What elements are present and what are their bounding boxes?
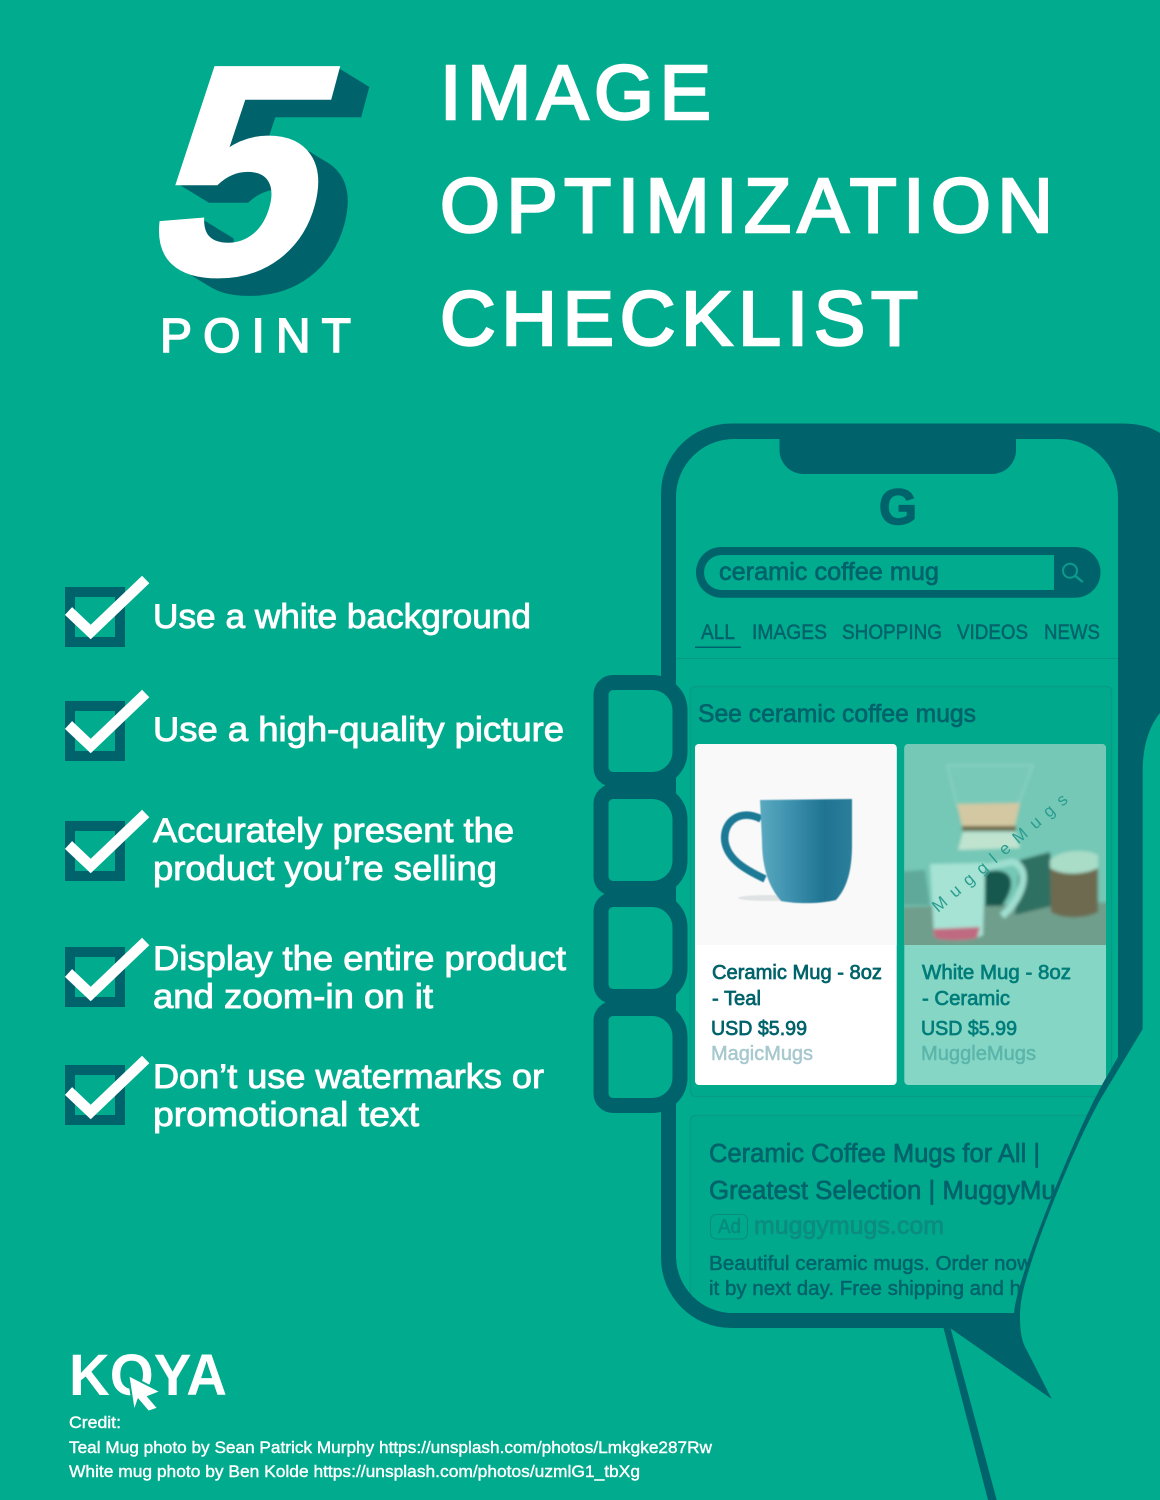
product card: teal mug (695, 744, 897, 1085)
credits: White mug photo by Ben Kolde https://unsplash.com/photos/uzmlG1_tbXg (69, 1462, 640, 1481)
panel: ad result: Greatest Selection | MuggyMugs (709, 1177, 1083, 1205)
wrist line (943, 1326, 997, 1500)
product card: white mug with watermark: USD $5.99 (921, 1018, 1017, 1040)
check item: no watermarks: promotional text (153, 1096, 420, 1134)
credits: Credit: (69, 1413, 121, 1432)
check item: high-quality picture: Use a high-quality picture (153, 711, 564, 749)
logo: koya: KOYA (69, 1343, 227, 1408)
panel: ad result: it by next day. Free shipping and h (709, 1278, 1021, 1300)
title: image optimization checklist (440, 50, 1053, 362)
search tabs: SHOPPING (842, 621, 942, 644)
phone screen (670, 430, 1130, 1356)
search tabs: IMAGES (752, 621, 827, 644)
phone frame and hand outline (661, 424, 1160, 1399)
product card: teal mug: - Teal (712, 988, 761, 1010)
check item: accurately present product: Accurately present the (153, 812, 514, 850)
product card: white mug with watermark: - Ceramic (922, 988, 1010, 1010)
check item: white background (68, 580, 531, 642)
search tabs: VIDEOS (957, 621, 1028, 644)
product card: white mug with watermark: MuggleMugs (921, 1043, 1036, 1065)
product card: white mug with watermark (904, 744, 1106, 1085)
check item: display entire product: and zoom-in on it (153, 978, 434, 1016)
ad badge: Ad (718, 1216, 741, 1238)
check item: display entire product: Display the entire product (153, 940, 567, 978)
checklist (68, 580, 567, 1134)
watermark text: MuggleMugs (928, 790, 1071, 916)
search bar (696, 547, 1100, 598)
panel: ad result (690, 1115, 1087, 1313)
check item: no watermarks: Don’t use watermarks or (153, 1058, 544, 1096)
heading: point label: POINT (160, 310, 351, 363)
big number 5 with extruded shadow: 5 (121, 2, 376, 338)
heading: see ceramic coffee mugs: See ceramic coffee mugs (698, 700, 976, 728)
product card: teal mug: Ceramic Mug - 8oz (712, 962, 882, 984)
panel: image results (690, 686, 1115, 1096)
credits (69, 1413, 713, 1481)
search tabs (676, 621, 1118, 659)
ad badge (710, 1214, 748, 1239)
search bar: ceramic coffee mug (719, 558, 939, 586)
icon: cursor arrow (128, 1375, 161, 1412)
check item: no watermarks (68, 1058, 544, 1134)
fingers (601, 682, 680, 1106)
phone held in hand (601, 424, 1160, 1500)
product card: white mug with watermark: White Mug - 8oz (922, 962, 1071, 984)
product card: teal mug: MagicMugs (711, 1043, 813, 1065)
check item: white background: Use a white background (153, 598, 531, 636)
panel: ad result: muggymugs.com (754, 1212, 944, 1240)
product card: teal mug: USD $5.99 (711, 1018, 807, 1040)
title: image optimization checklist: OPTIMIZATION (440, 163, 1053, 249)
credits: Teal Mug photo by Sean Patrick Murphy https://unsplash.com/photos/Lmkgke287Rw (69, 1438, 713, 1457)
icon: busy mug photo (904, 744, 1106, 945)
panel: ad result: Ceramic Coffee Mugs for All | (709, 1140, 1040, 1168)
search tabs: ALL (701, 621, 735, 644)
title: image optimization checklist: CHECKLIST (440, 276, 918, 362)
check item: display entire product (68, 940, 567, 1016)
icon: google G: G (879, 479, 917, 535)
icon: teal mug photo (725, 799, 852, 903)
title: image optimization checklist: IMAGE (440, 50, 711, 136)
check item: accurately present product: product you’re selling (153, 850, 497, 888)
panel: ad result: Beautiful ceramic mugs. Order now (709, 1253, 1033, 1275)
check item: accurately present product (68, 812, 514, 888)
check item: high-quality picture (68, 694, 564, 756)
search tabs: NEWS (1044, 621, 1100, 644)
